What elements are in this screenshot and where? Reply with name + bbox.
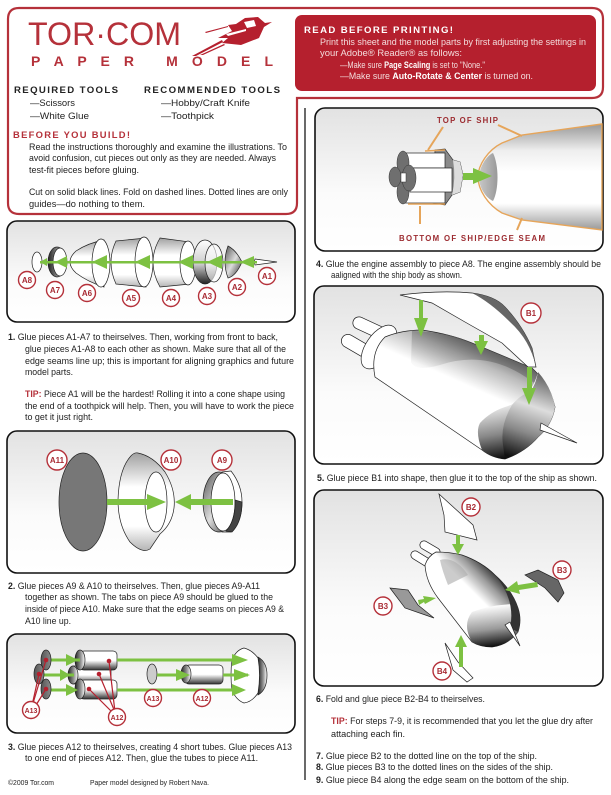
- ship body: [425, 552, 520, 647]
- text: before you build: Cut on solid black lines. Fold on dashed lines. Dotted lines are only: [29, 187, 288, 197]
- panel: header frame: [8, 8, 603, 214]
- panel: read before printing: —Make sure Auto-Rotate & Center is turned on.: [340, 71, 533, 81]
- text: required tools list: —Scissors: [30, 98, 75, 108]
- ship body: [374, 330, 555, 459]
- text: step 2: [8, 581, 284, 626]
- labels A9-A11: A9: [217, 456, 228, 465]
- spike: [505, 622, 520, 646]
- text: step 1: TIP: Piece A1 will be the hardest! Rolling it into a cone shape using: [25, 389, 285, 399]
- footer: designer credit: Paper model designed by Robert Nava.: [90, 778, 209, 787]
- arrows: assembly: [107, 494, 233, 510]
- text: recommended tools list: —Toothpick: [161, 111, 214, 121]
- engine tubes: [415, 545, 436, 563]
- labels B2-B4: B4: [437, 667, 448, 676]
- piece A10: [118, 453, 174, 550]
- text: before you build: Read the instructions thoroughly and examine the illustrations. To: [29, 142, 287, 152]
- piece A3: [193, 240, 223, 284]
- text: steps 7-9: 8. Glue pieces B3 to the dotted lines on the sides of the ship.: [316, 762, 553, 772]
- panel: step 5 fin B1: [314, 286, 603, 464]
- dots: [37, 658, 111, 691]
- label B1: B1: [526, 309, 537, 318]
- piece A4: [153, 238, 196, 287]
- labels A12-A13: A12: [196, 696, 209, 703]
- piece A2: [225, 246, 242, 278]
- leader lines: [31, 660, 115, 712]
- heading: before you build: BEFORE YOU BUILD!: [13, 129, 130, 140]
- labels A1-A8: [18, 268, 276, 306]
- icon: rocket logo: [192, 17, 272, 56]
- arrows: assembly order: [40, 255, 257, 269]
- panel: step 3 pieces A12-A13: [7, 634, 295, 733]
- fin B1: [400, 292, 536, 367]
- footer: copyright: ©2009 Tor.com: [8, 778, 54, 787]
- labels B2-B4: B3: [378, 602, 389, 611]
- panel: step 1 pieces A1-A8: [7, 221, 295, 322]
- labels A12-A13: A13: [147, 696, 160, 703]
- labels A1-A8: A7: [50, 286, 61, 295]
- labels B2-B4: B3: [557, 566, 568, 575]
- labels A1-A8: A2: [232, 283, 243, 292]
- labels A1-A8: A1: [262, 272, 273, 281]
- labels A12-A13: [22, 690, 210, 726]
- text: step 3: 3. Glue pieces A12 to theirselves, creating 4 short tubes. Glue pieces A13: [8, 742, 292, 752]
- heading: required tools: REQUIRED TOOLS: [14, 85, 119, 96]
- text: step 2: together as shown. The tabs on piece A9 should be glued to the: [25, 592, 273, 602]
- panel: step 4 engine to ship body: [315, 108, 603, 251]
- text: tip steps 7-9: [331, 716, 593, 739]
- panel: step 2 pieces A9-A11: [7, 431, 295, 573]
- fin B2: [439, 494, 477, 540]
- text: steps 7-9: 9. Glue piece B4 along the edge seam on the bottom of the ship.: [316, 775, 569, 785]
- text: step 2: 2. Glue pieces A9 & A10 to theirselves. Then, glue pieces A9-A11: [8, 581, 260, 591]
- text: before you build: test-fit pieces before gluing.: [29, 165, 139, 175]
- panel: read before printing: Print this sheet and the model parts by first adjusting the settings in: [320, 37, 586, 47]
- piece A11: [59, 453, 107, 551]
- text: step 5: 5. Glue piece B1 into shape, then glue it to the top of the ship as shown.: [317, 473, 597, 483]
- labels A12-A13: A12: [111, 715, 124, 722]
- labels A9-A11: A10: [164, 456, 179, 465]
- text: step 2: A10 line up.: [25, 616, 71, 626]
- subtitle: paper model: P A P E R M O D E L: [31, 53, 273, 69]
- labels A1-A8: A5: [126, 294, 137, 303]
- text: recommended tools list: —Hobby/Craft Knife: [161, 98, 250, 108]
- text: step 4: [316, 259, 601, 280]
- heading: recommended tools: RECOMMENDED TOOLS: [144, 85, 281, 96]
- text: step 1: 1. Glue pieces A1-A7 to theirselves. Then, working from front to back,: [8, 332, 278, 342]
- labels A1-A8: A6: [82, 289, 93, 298]
- text: required tools list: [30, 98, 89, 121]
- arrows: fins: [418, 535, 538, 667]
- text: step 2: inside of piece A10. Make sure that the edge seams on pieces A9 &: [25, 604, 284, 614]
- piece A6: [70, 239, 110, 287]
- fin B4: [445, 643, 473, 682]
- labels A9-A11: [47, 450, 232, 470]
- text: step 3: [8, 742, 292, 763]
- arrows: [44, 654, 250, 696]
- text: step 1: the end of a toothpick will help. Then, you will have to work the piece: [25, 401, 294, 411]
- arrows: down: [414, 300, 536, 405]
- panel: read before printing: —Make sure Page Scaling is set to "None.": [340, 60, 485, 70]
- heading: read before printing: READ BEFORE PRINTING!: [304, 25, 453, 36]
- title: Tor.com: TOR·COM: [28, 16, 181, 52]
- text: before you build: [29, 142, 288, 209]
- text: steps 7-9: [316, 751, 569, 785]
- ship body: [478, 124, 602, 230]
- piece A8: [32, 252, 42, 272]
- text: tip steps 7-9: attaching each fin.: [331, 729, 405, 739]
- spike: [540, 423, 577, 443]
- text: before you build: guides—do nothing to them.: [29, 199, 145, 209]
- panel: step 6 fins B2-B4: [314, 490, 603, 686]
- tubes A12: [68, 650, 117, 699]
- labels A12-A13: A13: [25, 708, 38, 715]
- text: step 1: edge seams line up; this is important for aligning graphics and future: [25, 356, 294, 366]
- text: step 1: model parts.: [25, 367, 73, 377]
- text: before you build: avoid confusion, cut pieces out only as they are needed. Always: [29, 153, 276, 163]
- piece A1: [254, 259, 277, 265]
- label: top of ship: TOP OF SHIP: [437, 116, 498, 125]
- text: recommended tools list: [161, 98, 250, 121]
- arrows: orange callouts: [420, 125, 522, 230]
- piece A9: [203, 471, 242, 532]
- text: step 1: [8, 332, 294, 422]
- text: tip steps 7-9: TIP: For steps 7-9, it is recommended that you let the glue dry after: [331, 716, 593, 726]
- text: step 6: 6. Fold and glue piece B2-B4 to theirselves.: [316, 694, 485, 704]
- panel: read before printing: [295, 15, 596, 91]
- disc single: [147, 664, 157, 684]
- labels B2-B4: B2: [466, 503, 477, 512]
- arrow: green: [463, 168, 492, 184]
- tube single: [181, 665, 223, 684]
- panel: read before printing: your Adobe® Reader® as follows:: [320, 48, 462, 58]
- text: step 1: to get it just right.: [25, 412, 93, 422]
- labels A1-A8: A8: [22, 276, 33, 285]
- fin B3 left: [390, 588, 434, 618]
- piece A7: [48, 247, 67, 277]
- labels A1-A8: A3: [202, 292, 213, 301]
- text: step 4: 4. Glue the engine assembly to piece A8. The engine assembly should be: [316, 259, 601, 269]
- part A11 assembly: [231, 648, 267, 703]
- label B1: [521, 303, 541, 323]
- piece A5: [111, 237, 153, 287]
- text: step 3: to one end of pieces A12. Then, glue the tubes to piece A11.: [25, 753, 258, 763]
- labels A1-A8: A4: [166, 294, 177, 303]
- labels B2-B4: [374, 498, 571, 680]
- text: required tools list: —White Glue: [30, 111, 89, 121]
- discs A13: [34, 650, 51, 699]
- engine tubes: [348, 319, 404, 375]
- labels A9-A11: A11: [50, 456, 65, 465]
- engine assembly: [389, 149, 463, 205]
- text: step 1: glue pieces A1-A8 to each other as shown. Make sure that all of the: [25, 344, 286, 354]
- fin B3 right: [525, 570, 564, 602]
- text: step 4: aaligned with the ship body as shown.: [331, 270, 462, 280]
- text: steps 7-9: 7. Glue piece B2 to the dotted line on the top of the ship.: [316, 751, 537, 761]
- label: bottom of ship: BOTTOM OF SHIP/EDGE SEAM: [399, 234, 545, 243]
